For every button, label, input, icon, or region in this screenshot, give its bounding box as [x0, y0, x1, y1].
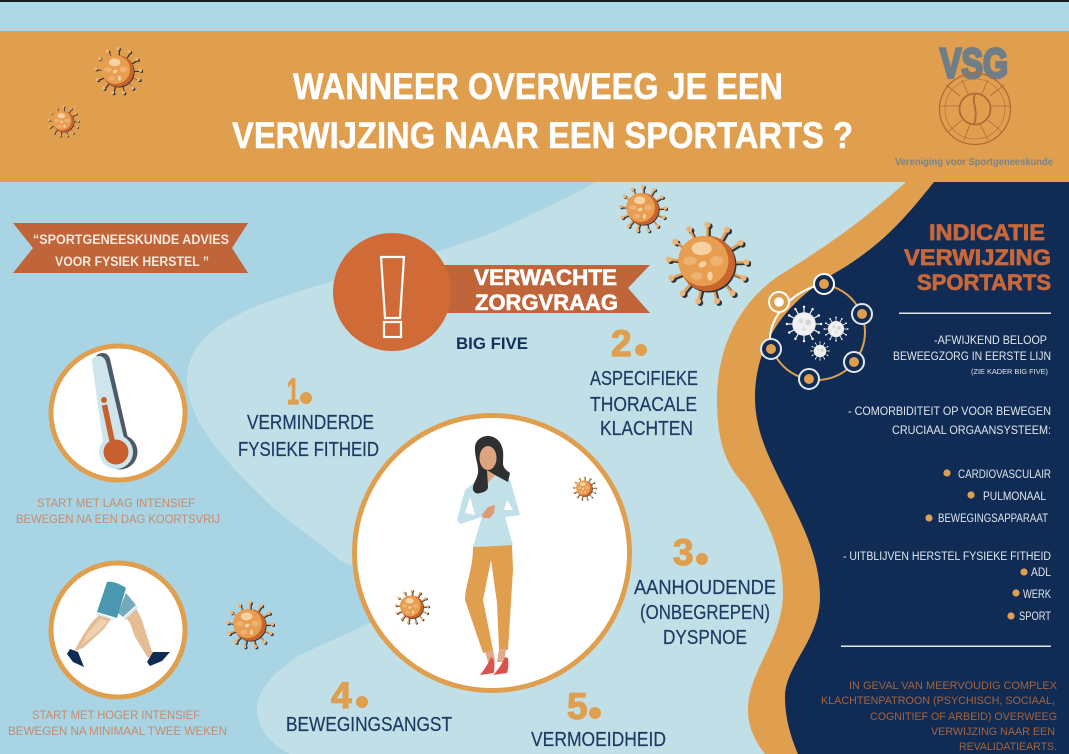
text block: comorbiditeit: [848, 406, 1051, 525]
item 1: VERMINDERDE: [247, 412, 374, 434]
icon: ring with white viruses: [761, 274, 872, 389]
text block: revalidatiearts: [821, 680, 1058, 753]
subheading: big five: BIG FIVE: [456, 334, 528, 353]
banner: sportgeneeskunde advies: [13, 223, 248, 273]
item 5: 5: [567, 686, 588, 727]
top dark edge: [0, 0, 1069, 2]
item 3: (ONBEGREPEN): [640, 602, 770, 624]
text block: uitblijven herstel: WERK: [1023, 589, 1051, 601]
item 4: [286, 675, 452, 736]
item 2: [590, 323, 698, 440]
item 2: 2: [611, 323, 632, 364]
item 2: KLACHTEN: [600, 418, 693, 440]
text block: revalidatiearts: COGNITIEF OF ARBEID) OVERWEEG: [870, 711, 1057, 723]
text block: uitblijven herstel: - UITBLIJVEN HERSTEL FYSIEKE FITHEID: [843, 551, 1051, 563]
caption: laag intensief: BEWEGEN NA EEN DAG KOORTSVRIJ: [16, 512, 220, 526]
header band: [0, 31, 1069, 182]
heading: indicatie verwijzing sportarts: [904, 220, 1051, 295]
item 3: [634, 532, 776, 649]
item 3: 3: [673, 532, 694, 573]
text block: comorbiditeit: - COMORBIDITEIT OP VOOR BEWEGEN: [848, 406, 1051, 418]
heading: indicatie verwijzing sportarts: SPORTARTS: [917, 270, 1051, 295]
orange wave: [717, 182, 1069, 754]
title: VERWIJZING NAAR EEN SPORTARTS ?: [232, 115, 853, 156]
badge: verwachte zorgvraag: ZORGVRAAG: [475, 290, 618, 315]
caption: hoger intensief: START MET HOGER INTENSIEF: [32, 708, 200, 722]
item 1: FYSIEKE FITHEID: [238, 439, 379, 461]
text block: afwijkend beloop: [893, 335, 1051, 376]
title: WANNEER OVERWEEG JE EEN: [293, 66, 783, 107]
item 1: [238, 371, 379, 461]
text block: comorbiditeit: BEWEGINGSAPPARAAT: [938, 513, 1048, 525]
icon: virus top small: [619, 185, 668, 234]
item 1: 1: [287, 371, 299, 412]
figure: woman: [457, 436, 520, 675]
icon: virus medium: [395, 590, 430, 625]
text block: comorbiditeit: PULMONAAL: [983, 491, 1047, 503]
text block: uitblijven herstel: ADL: [1031, 567, 1052, 579]
text block: comorbiditeit: CRUCIAAL ORGAANSYSTEEM:: [892, 425, 1051, 437]
item 3: DYSPNOE: [663, 627, 747, 649]
banner: sportgeneeskunde advies: VOOR FYSIEK HERSTEL ”: [55, 254, 209, 269]
item 2: THORACALE: [590, 394, 697, 416]
caption: laag intensief: START MET LAAG INTENSIEF: [37, 496, 195, 510]
text block: afwijkend beloop: BEWEEGZORG IN EERSTE LIJN: [893, 351, 1051, 363]
heading: indicatie verwijzing sportarts: INDICATIE: [929, 220, 1045, 245]
badge: verwachte zorgvraag: [333, 233, 650, 351]
caption: laag intensief: [16, 496, 220, 526]
item 5: [531, 686, 666, 751]
title: [232, 66, 853, 156]
text block: revalidatiearts: VERWIJZING NAAR EEN: [931, 726, 1055, 738]
caption: hoger intensief: [8, 708, 227, 738]
item 2: ASPECIFIEKE: [590, 368, 698, 390]
text block: uitblijven herstel: [843, 551, 1052, 623]
top light strip: [0, 2, 1069, 31]
icon: virus small: [572, 476, 597, 501]
icon: header virus large: [94, 47, 143, 96]
icon circle: thermometer: [51, 346, 185, 480]
item 4: 4: [331, 675, 352, 716]
item 4: BEWEGINGSANGST: [286, 714, 452, 736]
item 3: AANHOUDENDE: [634, 577, 776, 599]
text block: uitblijven herstel: SPORT: [1019, 611, 1051, 623]
center circle with woman: [354, 416, 630, 690]
heading: indicatie verwijzing sportarts: VERWIJZING: [904, 245, 1051, 270]
navy panel: [755, 182, 1069, 754]
logo: VSG: VSG: [940, 40, 1008, 86]
icon: virus top large: [666, 222, 752, 307]
badge: verwachte zorgvraag: VERWACHTE: [474, 265, 617, 290]
icon: virus left: [226, 601, 275, 650]
caption: hoger intensief: BEWEGEN NA MINIMAAL TWEE WEKEN: [8, 724, 227, 738]
text block: comorbiditeit: CARDIOVASCULAIR: [958, 469, 1051, 481]
logo: VSG: [895, 40, 1053, 168]
text block: afwijkend beloop: -AFWIJKEND BELOOP: [934, 335, 1047, 347]
pale background wave: [187, 182, 1000, 754]
logo: VSG: Vereniging voor Sportgeneeskunde: [895, 157, 1053, 168]
icon: header virus small: [48, 106, 80, 138]
icon circle: running legs: [51, 563, 185, 697]
text block: revalidatiearts: IN GEVAL VAN MEERVOUDIG COMPLEX: [849, 680, 1058, 692]
text block: revalidatiearts: KLACHTENPATROON (PSYCHISCH, SOCIAAL,: [821, 695, 1055, 707]
item 5: VERMOEIDHEID: [531, 729, 666, 751]
banner: sportgeneeskunde advies: “SPORTGENEESKUNDE ADVIES: [33, 232, 229, 247]
text block: afwijkend beloop: (ZIE KADER BIG FIVE): [971, 369, 1048, 376]
text block: revalidatiearts: REVALIDATIEARTS.: [959, 741, 1057, 753]
